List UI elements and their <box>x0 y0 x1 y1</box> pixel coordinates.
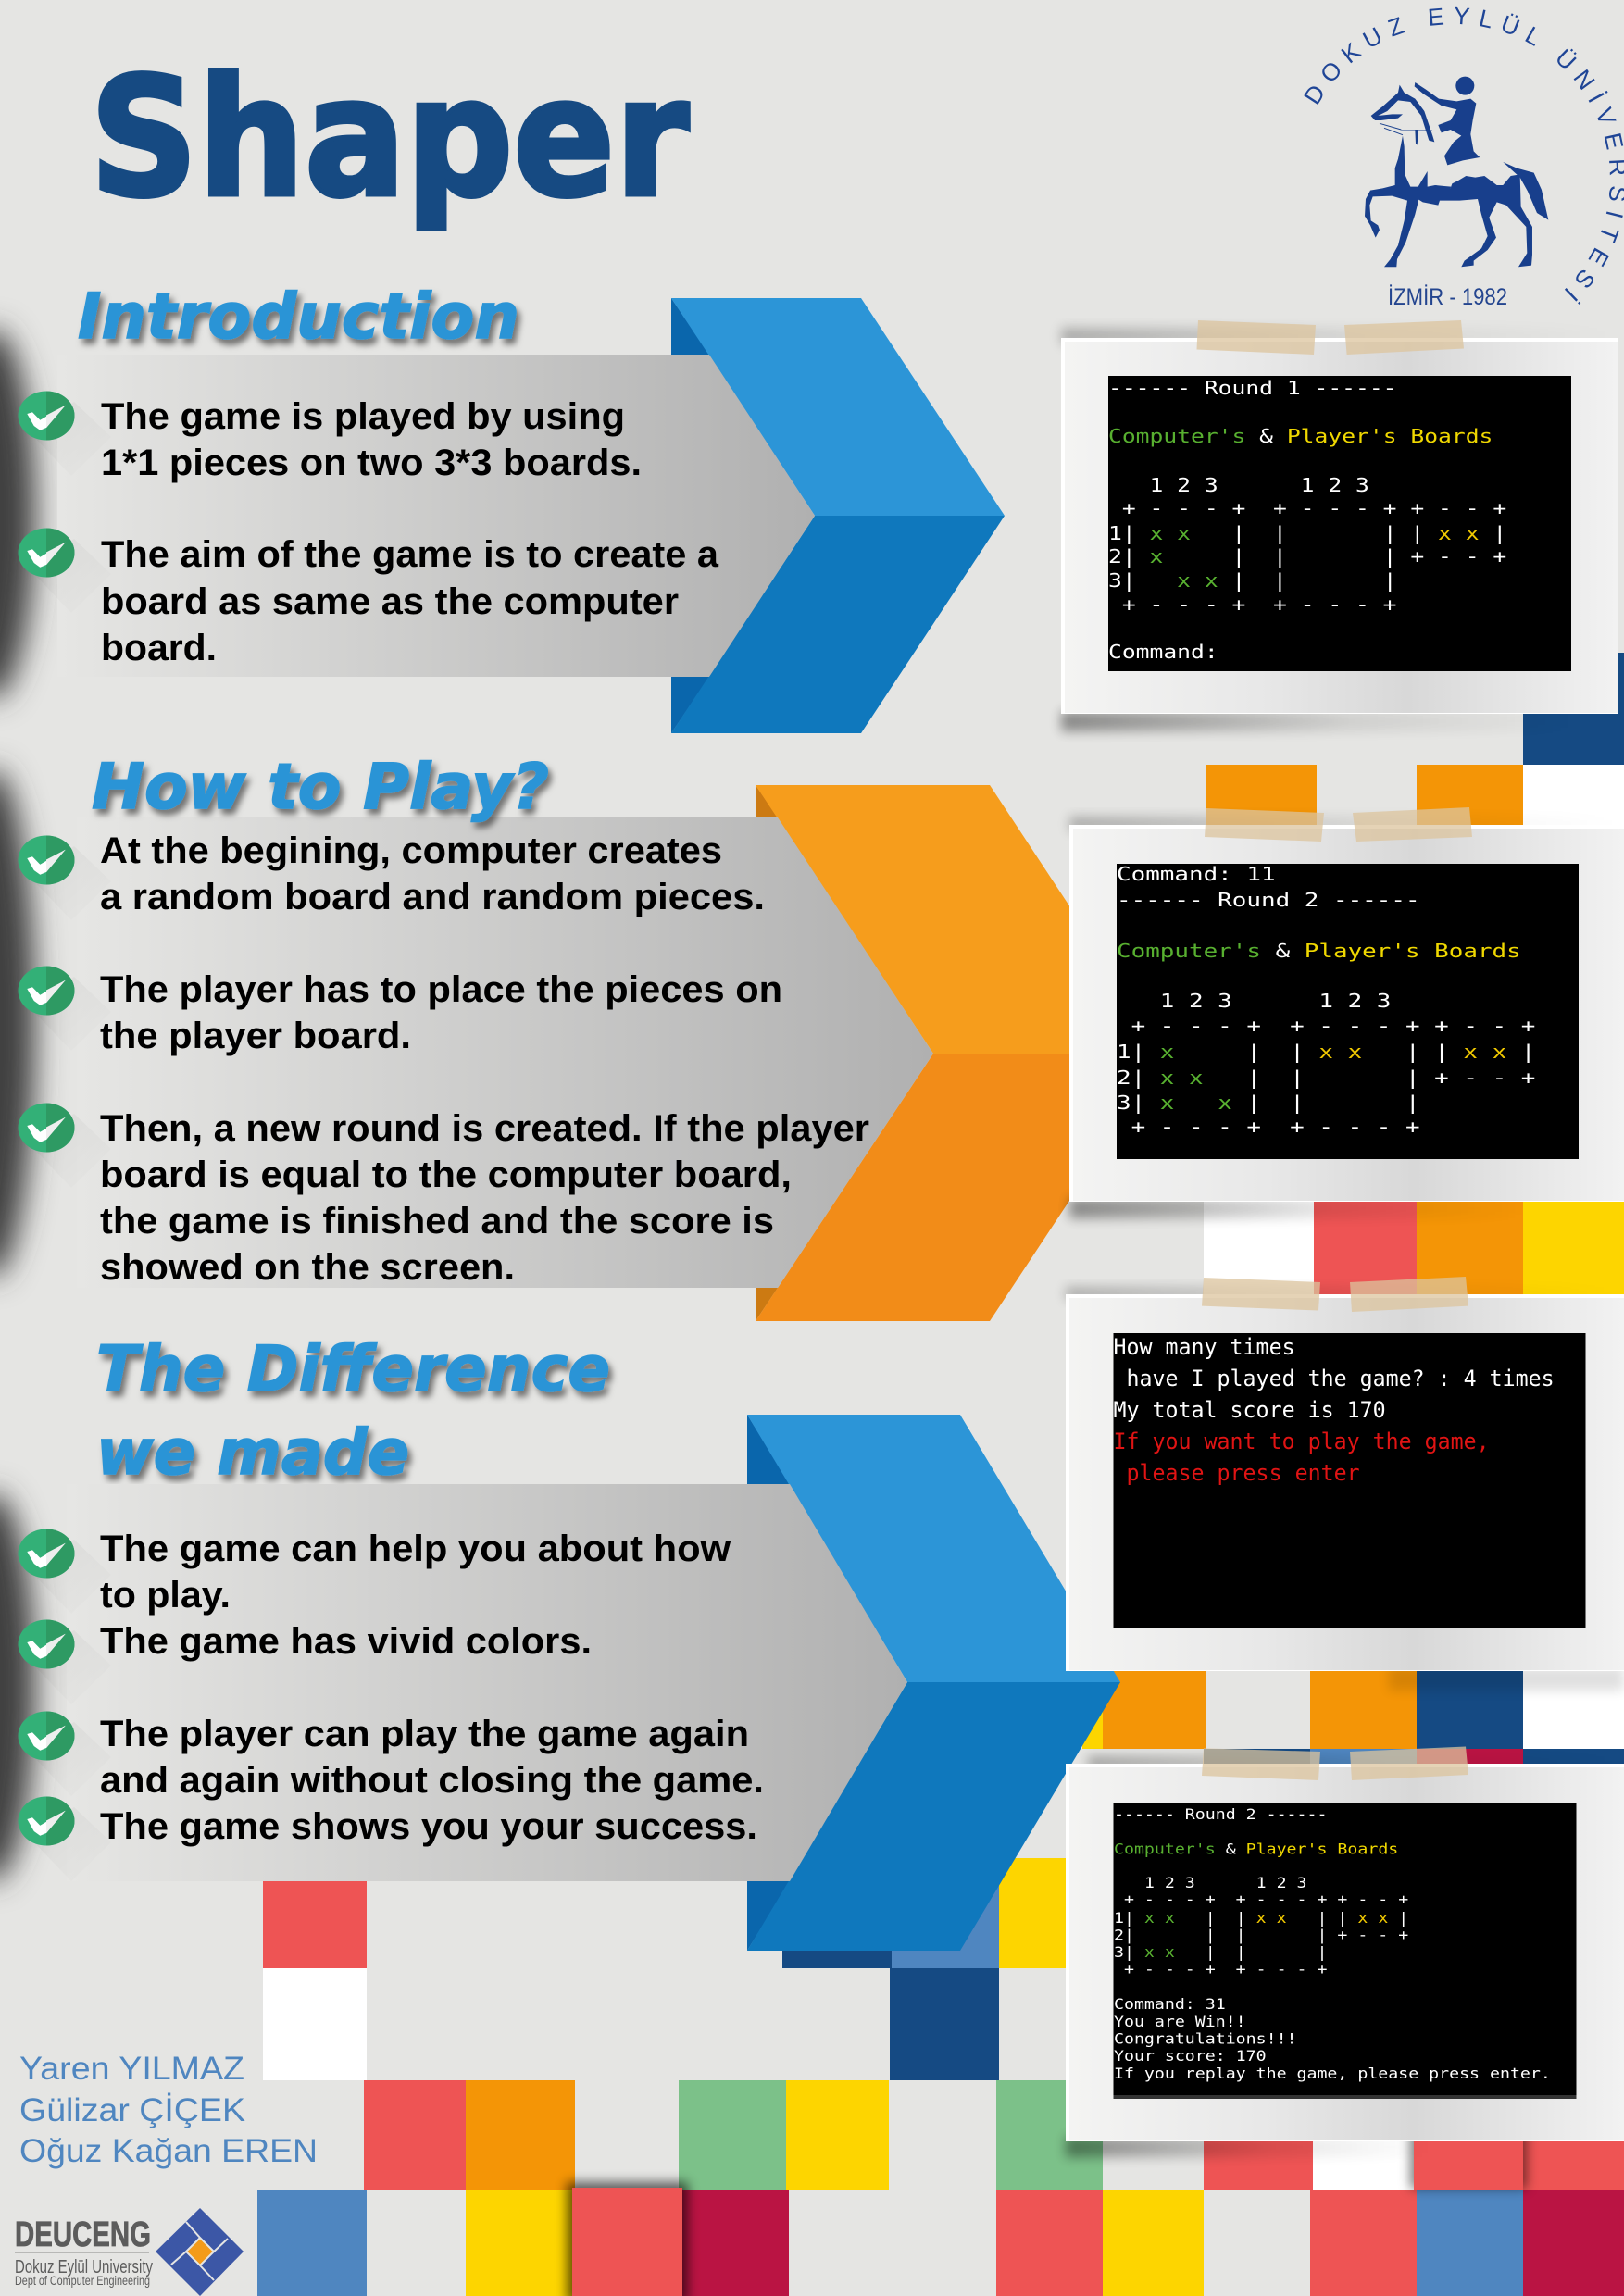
terminal: round 1: 2| x | | | + - - + <box>1108 546 1506 568</box>
screenshot frame 1 <box>1061 328 1618 731</box>
wordmark: Dokuz Eylül University <box>15 2257 153 2277</box>
bullet 1: The game can help you about how <box>100 1529 731 1569</box>
panel: Introduction <box>19 281 1005 733</box>
chevron: orange arrow <box>756 785 1167 1321</box>
terminal: win screen: You are Win!! <box>1114 2014 1246 2031</box>
terminal: round 2: + - - - + + - - - + + - - + <box>1117 1015 1535 1037</box>
bullet 3 <box>19 1711 764 1801</box>
terminal: win screen: Command: 31 <box>1114 1996 1226 2014</box>
terminal: round 2: Computer's & Player's Boards <box>1117 940 1521 962</box>
icon: horse and rider <box>1365 77 1548 267</box>
screenshot frame 4 <box>1066 1756 1624 2157</box>
terminal: round 2: Command: 11 <box>1117 863 1276 885</box>
bullet 3: and again without closing the game. <box>100 1760 764 1801</box>
terminal: round 2: 2| x x | | | + - - + <box>1117 1067 1535 1089</box>
gray arrow panel <box>67 1484 907 1881</box>
title: Shaper <box>90 43 689 233</box>
bullet 2 <box>19 1620 592 1704</box>
heading: Introduction: Introduction <box>78 281 519 354</box>
terminal: win screen: 2| | | | + - - + <box>1114 1928 1408 1944</box>
terminal: round 2 <box>1117 863 1535 1138</box>
bullet 1 <box>19 830 765 920</box>
terminal: round 1: 1 2 3 1 2 3 <box>1108 475 1369 496</box>
terminal: round 1: + - - - + + - - - + + - - + <box>1108 498 1506 519</box>
wordmark <box>15 2215 153 2288</box>
circular university name: DOKUZ EYLÜL ÜNİVERSİTESİ <box>1304 7 1624 305</box>
university logo <box>1304 7 1624 310</box>
bullet 2: board as same as the computer <box>101 581 679 622</box>
terminal: round 1: Computer's & Player's Boards <box>1108 426 1493 447</box>
bullet 2: the player board. <box>100 1016 411 1056</box>
colour block mosaic <box>257 653 1624 2296</box>
heading: How to Play?: How to Play? <box>92 751 549 824</box>
terminal: win screen <box>1114 1806 1551 2083</box>
bullet 1: a random board and random pieces. <box>100 877 765 917</box>
terminal: score screen: If you want to play the game, <box>1113 1429 1490 1454</box>
bullet 2: The aim of the game is to create a <box>101 534 719 575</box>
icon: diamond mark <box>156 2208 244 2296</box>
authors <box>19 2050 318 2169</box>
terminal: score screen <box>1113 1334 1555 1486</box>
terminal: win screen: + - - - + + - - - + <box>1114 1962 1327 1978</box>
bullet 3: Then, a new round is created. If the player <box>100 1108 869 1149</box>
terminal: win screen: 3| x x | | | <box>1114 1944 1327 1962</box>
terminal: score screen: please press enter <box>1113 1460 1360 1486</box>
bullet 1: to play. <box>100 1575 231 1616</box>
left edge shadows <box>0 329 35 1881</box>
bullet 2: The game has vivid colors. <box>100 1621 592 1662</box>
heading: The Difference we made: The Difference <box>96 1333 610 1406</box>
terminal: round 1: 1| x x | | | | x x | <box>1108 523 1506 544</box>
terminal: win screen: ------ Round 2 ------ <box>1114 1806 1327 1824</box>
bullet 1: The game is played by using <box>101 396 625 437</box>
bullet 1 <box>19 1529 731 1616</box>
gray arrow panel <box>77 817 933 1288</box>
wordmark: DEUCENG <box>15 2215 151 2254</box>
screenshot frame 3 <box>1066 1287 1624 1691</box>
chevron: blue arrow <box>671 298 1005 733</box>
terminal: round 1: ------ Round 1 ------ <box>1108 378 1397 399</box>
bullet 4 <box>19 1796 757 1881</box>
bullet 3: board is equal to the computer board, <box>100 1154 792 1195</box>
terminal: round 1: Command: <box>1108 642 1218 663</box>
authors: Gülizar ÇİÇEK <box>19 2091 245 2128</box>
terminal: score screen: have I played the game? : 4 times <box>1113 1366 1555 1391</box>
terminal: win screen: 1| x x | | x x | | x x | <box>1114 1910 1408 1928</box>
terminal: win screen: If you replay the game, please press enter. <box>1114 2065 1551 2083</box>
bullet 1 <box>19 391 642 483</box>
bullet 3: the game is finished and the score is <box>100 1201 774 1242</box>
bullet 3 <box>19 1104 869 1288</box>
heading: The Difference we made <box>96 1333 610 1490</box>
bullet 1: At the begining, computer creates <box>100 830 722 871</box>
terminal: win screen: 1 2 3 1 2 3 <box>1114 1875 1306 1892</box>
terminal: win screen: + - - - + + - - - + + - - + <box>1114 1891 1408 1909</box>
terminal: round 2: ------ Round 2 ------ <box>1117 889 1420 911</box>
tape strips <box>1196 320 1472 1780</box>
chevron: blue arrow <box>747 1415 1120 1951</box>
authors: Oğuz Kağan EREN <box>19 2132 318 2169</box>
bullet 2: The player has to place the pieces on <box>100 969 782 1010</box>
bullet 2 <box>19 528 719 668</box>
terminal: round 2: 1 2 3 1 2 3 <box>1117 990 1391 1012</box>
bullet 2: board. <box>101 628 217 668</box>
bullet 4: The game shows you your success. <box>100 1806 757 1847</box>
terminal: score screen: My total score is 170 <box>1113 1397 1386 1423</box>
terminal: win screen: Your score: 170 <box>1114 2048 1267 2065</box>
heading: The Difference we made: we made <box>96 1416 409 1490</box>
terminal: round 1 <box>1108 378 1506 663</box>
terminal: round 1: + - - - + + - - - + <box>1108 594 1397 616</box>
gray arrow panel <box>57 355 815 677</box>
authors: Yaren YILMAZ <box>19 2050 244 2087</box>
panel: The Difference we made <box>19 1333 1120 1951</box>
terminal: score screen: How many times <box>1113 1334 1295 1360</box>
bullet 3: showed on the screen. <box>100 1247 515 1288</box>
bullet 1: 1*1 pieces on two 3*3 boards. <box>101 443 642 483</box>
panel: How to Play <box>19 751 1167 1321</box>
founding text: İZMİR - 1982 <box>1388 283 1507 310</box>
screenshot frame 2 <box>1069 817 1624 1218</box>
terminal: round 2: 1| x | | x x | | x x | <box>1117 1041 1535 1063</box>
terminal: round 2: + - - - + + - - - + <box>1117 1116 1420 1138</box>
terminal: win screen: Congratulations!!! <box>1114 2031 1297 2048</box>
terminal: win screen: Computer's & Player's Boards <box>1114 1841 1398 1858</box>
bullet 2 <box>19 967 782 1056</box>
terminal: round 1: 3| x x | | | <box>1108 570 1397 592</box>
wordmark: Dept of Computer Engineering <box>15 2273 150 2288</box>
bullet 3: The player can play the game again <box>100 1714 749 1754</box>
department logo <box>15 2208 244 2296</box>
terminal: round 2: 3| x x | | | <box>1117 1092 1420 1114</box>
